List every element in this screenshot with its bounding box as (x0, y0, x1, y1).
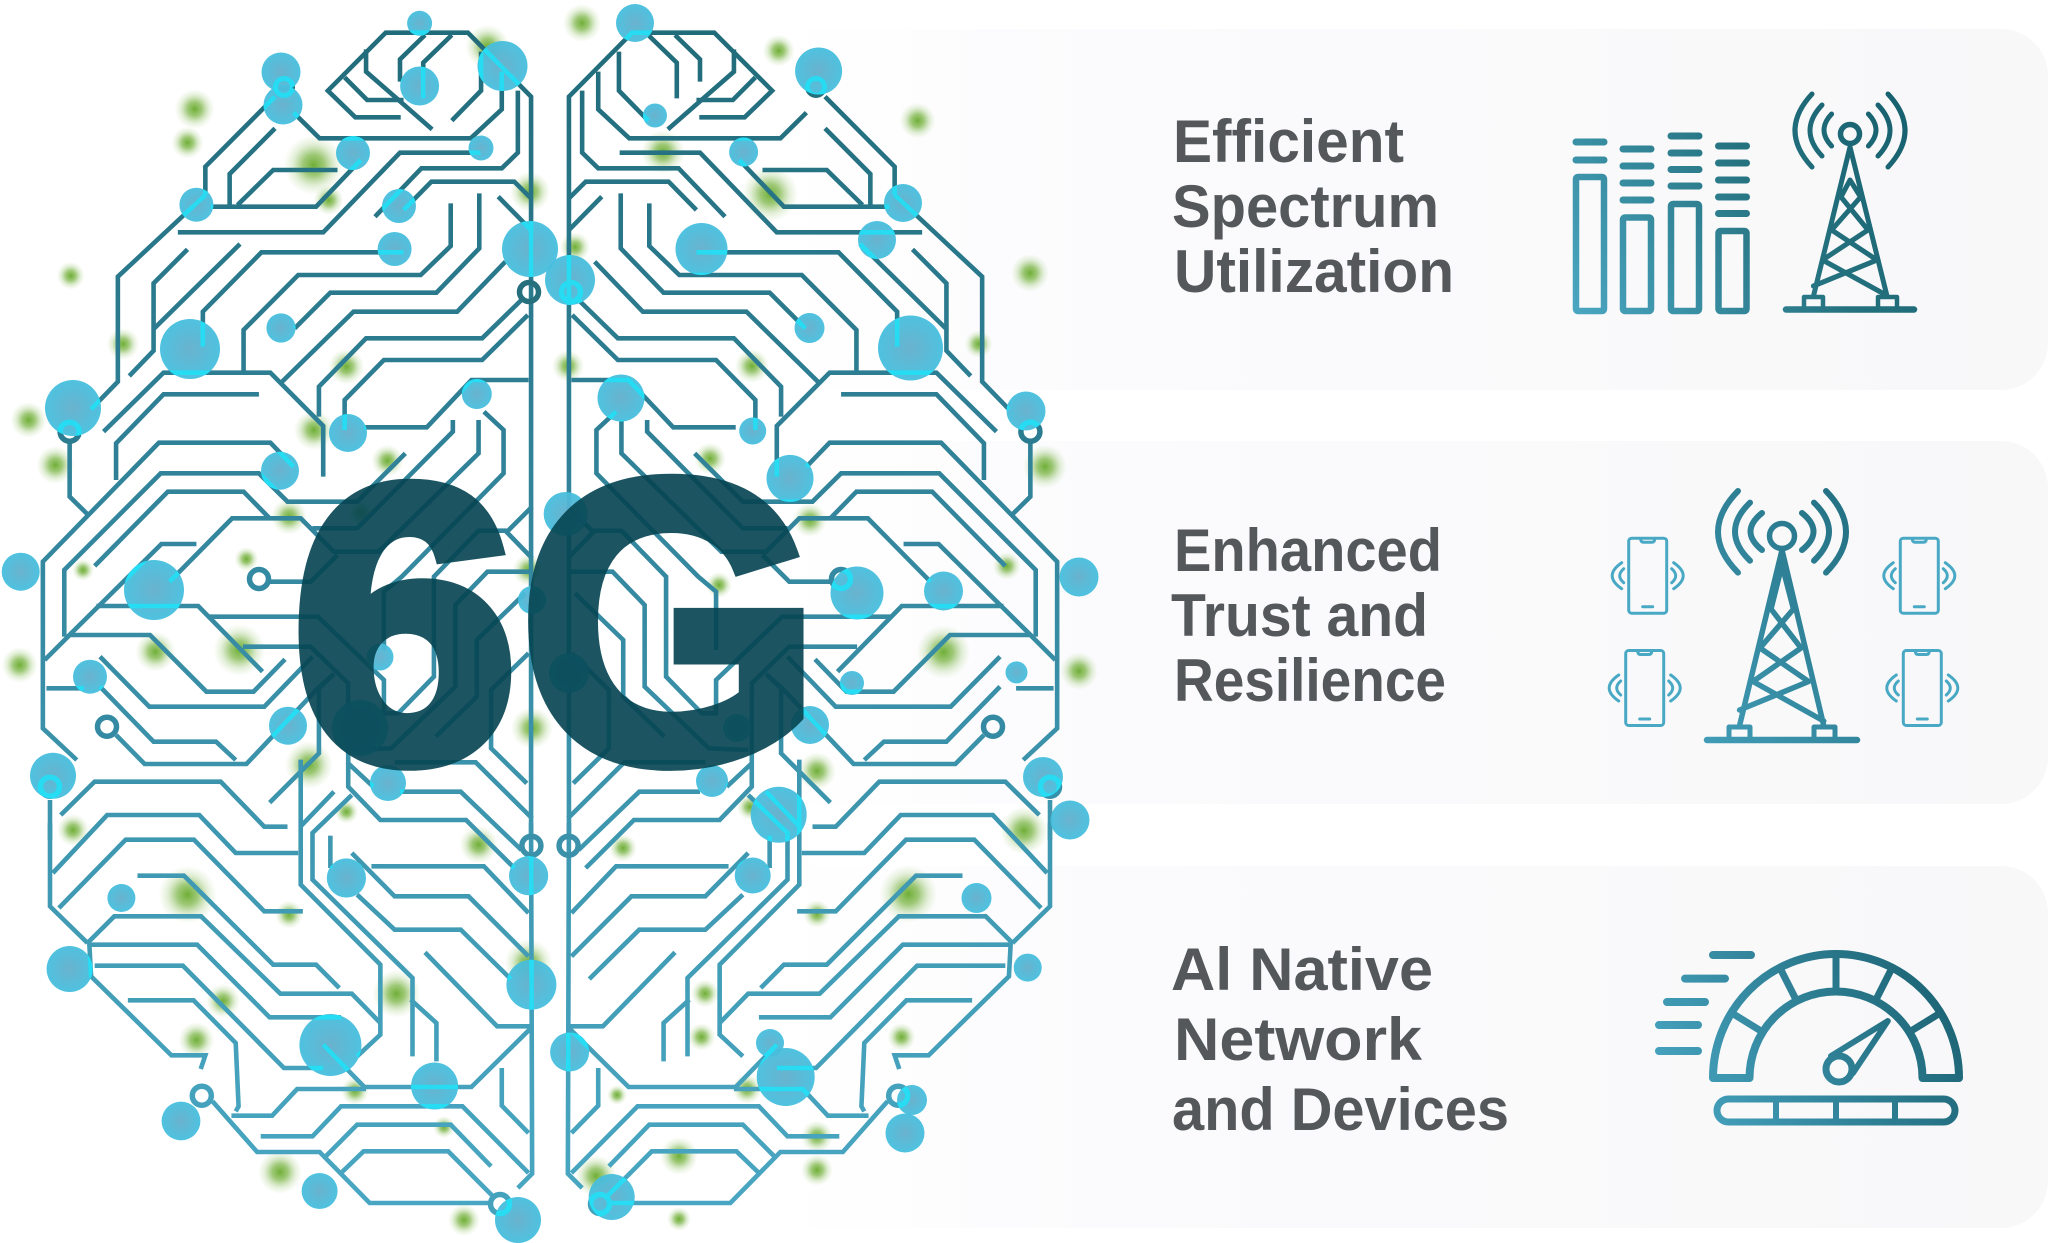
heading: AI Native Network and Devices: and Devices (1172, 1076, 1509, 1143)
heading: Enhanced Trust and Resilience: Trust and (1171, 582, 1428, 649)
phone: bottom left (1609, 650, 1680, 726)
icon: speedometer (1659, 954, 1959, 1122)
phone: bottom right (1887, 650, 1958, 726)
brain circuit: right hemisphere traces (559, 33, 1060, 1213)
phone: top left (1612, 538, 1683, 613)
heading: AI Native Network and Devices: Al Native (1171, 936, 1433, 1003)
heading: AI Native Network and Devices: Network (1174, 1006, 1423, 1073)
heading: Efficient Spectrum Utilization: Utilization (1174, 238, 1454, 305)
blue bubble nodes (2, 4, 1099, 1243)
green glow nodes (2, 4, 1098, 1236)
panel: enhanced trust and resilience (700, 441, 2048, 804)
brain circuit: left hemisphere traces (40, 33, 541, 1213)
cyan trace highlights inside bubbles (40, 33, 1060, 1213)
tower (1707, 491, 1857, 740)
title: 6G (292, 398, 821, 845)
icon: cell tower with signal waves (1786, 94, 1914, 310)
heading: Efficient Spectrum Utilization: Spectrum (1172, 173, 1439, 240)
icon: tower with four phones (1609, 491, 1958, 740)
title: 6G: G (519, 398, 821, 845)
icon: spectrum bars (1576, 136, 1746, 311)
title: 6G: 6 (292, 407, 518, 842)
panel: efficient spectrum utilization (700, 29, 2048, 390)
panel: AI native network and devices (700, 866, 2048, 1228)
heading: Efficient Spectrum Utilization: Efficient (1173, 108, 1404, 175)
phone: top right (1884, 538, 1955, 613)
heading: Enhanced Trust and Resilience: Enhanced (1174, 517, 1442, 584)
heading: Enhanced Trust and Resilience: Resilience (1174, 647, 1446, 714)
